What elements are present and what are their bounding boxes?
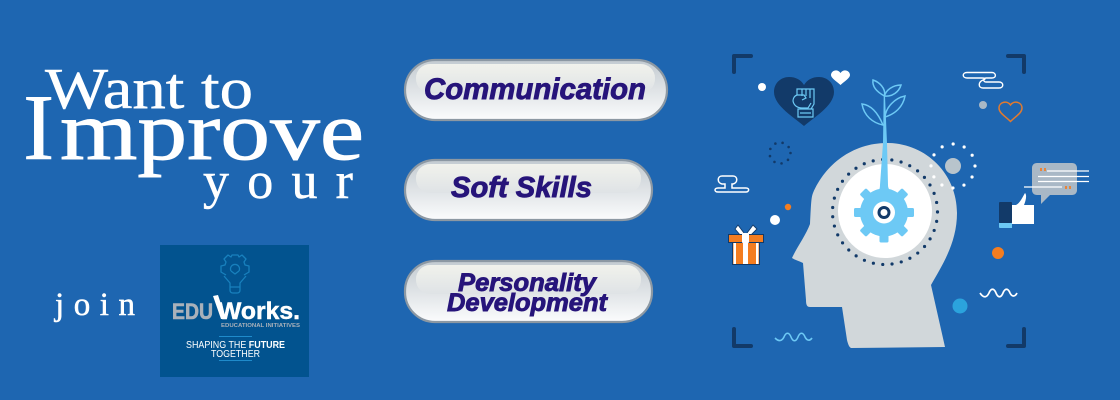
logo wordmark: Works. — [218, 298, 300, 325]
small orange dot — [785, 204, 791, 210]
logo: EDUWorks — [160, 245, 309, 377]
plant stem and leaves — [862, 80, 905, 193]
white squiggle left — [715, 176, 749, 192]
white dot — [758, 83, 766, 91]
white dot by head — [770, 215, 780, 225]
join label: join — [54, 287, 135, 323]
button: Communication: Communication — [424, 73, 646, 106]
icon: fist — [793, 89, 814, 117]
navy dot ring — [832, 160, 938, 264]
navy dotted ring — [770, 142, 790, 164]
corner brackets — [734, 56, 1024, 346]
button: Personality Development: Development — [447, 289, 609, 317]
white dotted ring — [931, 144, 975, 188]
speech bubble — [1024, 163, 1089, 204]
gear — [854, 188, 914, 242]
button: Personality Development: Personality — [458, 269, 597, 297]
blue dot — [952, 298, 968, 314]
thumbs up — [999, 193, 1034, 228]
navy heart with fist — [774, 77, 834, 126]
logo wordmark: EDUCATIONAL INITIATIVES — [221, 323, 300, 329]
white circle — [838, 164, 932, 258]
button: Communication — [405, 60, 667, 120]
logo wordmark: SHAPING THE FUTURE — [186, 340, 285, 351]
heading: your — [203, 153, 353, 210]
head silhouette — [792, 143, 957, 348]
white heart — [831, 70, 850, 85]
orange dot — [992, 247, 1004, 259]
grey dot — [979, 101, 987, 109]
logo wordmark: EDU — [172, 299, 213, 324]
heading: I — [23, 76, 54, 180]
heading: Want to — [45, 56, 253, 121]
illustration: head and icons — [715, 56, 1089, 348]
white wave — [980, 289, 1017, 297]
white squiggle right — [963, 72, 1003, 88]
icon: gear bulb — [221, 255, 249, 293]
blue wave — [775, 333, 812, 341]
gift box — [728, 225, 764, 264]
orange outline heart — [999, 102, 1022, 122]
logo wordmark — [172, 295, 300, 360]
logo wordmark: TOGETHER — [211, 349, 260, 360]
button: Soft Skills — [405, 160, 652, 220]
button: Soft Skills: Soft Skills — [451, 172, 592, 204]
heading: mprove — [60, 85, 364, 178]
button: Personality Development — [405, 261, 652, 322]
heading — [23, 56, 364, 210]
